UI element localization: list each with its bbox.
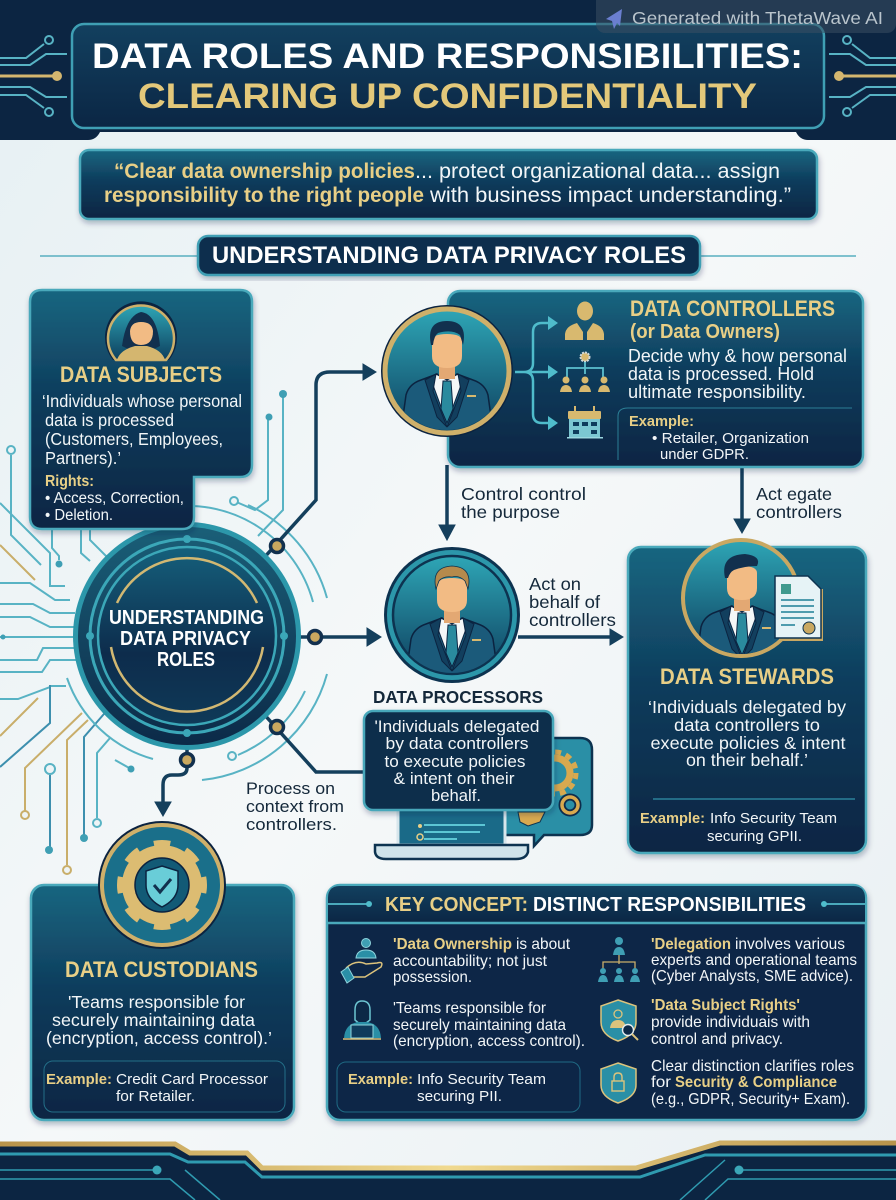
arrow: controllers to stewards [734, 465, 750, 533]
text: clear distinction: Clear distinction clarifies roles [651, 1058, 854, 1075]
description: on their behalf.’ [686, 750, 808, 770]
heading [630, 296, 835, 343]
key concept heading strip: DISTINCT RESPONSIBILITIES [533, 894, 806, 916]
label: process on context: Process on [246, 779, 335, 798]
description [42, 391, 242, 468]
icon: female avatar [105, 301, 177, 360]
icon: delegation org chart [598, 937, 640, 982]
heading: DATA STEWARDS [660, 664, 834, 689]
heading: data processors: DATA PROCESSORS [373, 687, 543, 707]
heading: (or Data Owners) [630, 321, 780, 343]
circuit traces left [0, 36, 67, 116]
hub label: DATA PRIVACY [120, 628, 252, 650]
label: act egate controllers: Act egate [756, 484, 832, 504]
description: 'Teams responsible for [68, 992, 245, 1012]
description: ‘Individuals whose personal [42, 391, 242, 411]
panel: data processor description: behalf. [431, 786, 481, 805]
arrow: hub to processors [298, 628, 381, 646]
rights list: • Deletion. [45, 507, 113, 524]
description [628, 346, 847, 402]
description: execute policies & intent [650, 733, 846, 753]
panel: data processor description: & intent on their [394, 769, 515, 788]
example box: securing PII. [417, 1088, 502, 1105]
arrow: hub to processor box [262, 712, 364, 772]
title panel [72, 24, 824, 128]
icon: hand with person [341, 938, 382, 983]
description: Decide why & how personal [628, 346, 847, 366]
text: delegation: 'Delegation [651, 936, 731, 953]
text: teams responsible: (encryption, access control). [393, 1033, 585, 1050]
section heading [40, 236, 856, 275]
label: act on behalf: controllers [529, 610, 616, 630]
example box: under GDPR. [660, 446, 749, 463]
label: process on context: controllers. [246, 815, 337, 834]
example box: Example: [46, 1071, 112, 1088]
description: Partners).’ [45, 448, 121, 468]
example box: Credit Card Processor [116, 1071, 268, 1088]
footer band [0, 1143, 896, 1200]
description: (encryption, access control).’ [46, 1028, 272, 1048]
icon: shield with search [601, 1000, 638, 1041]
text: clear distinction: Security & Compliance [675, 1074, 837, 1091]
label: process on context [246, 779, 344, 834]
quote text: with business impact understanding.” [429, 184, 791, 207]
icon: steward avatar [683, 540, 799, 663]
text: data subject rights [651, 997, 810, 1048]
text: data ownership: accountability; not just [393, 953, 548, 970]
panel: data subjects [30, 290, 252, 529]
arrow: controllers to processors [439, 465, 455, 540]
example box: Info Security Team [417, 1071, 546, 1088]
title line 2: CLEARING UP CONFIDENTIALITY [138, 77, 757, 116]
circuit traces around hub [0, 390, 327, 874]
title line 1: DATA ROLES AND RESPONSIBILITIES: [92, 37, 803, 76]
text: clear distinction: (e.g., GDPR, Security+ Exam). [651, 1091, 850, 1108]
rights list: • Access, Correction, [45, 490, 184, 507]
icon: certificate [775, 576, 823, 641]
arrow: hub to controllers [262, 364, 376, 560]
description [648, 697, 846, 770]
hub label [109, 607, 264, 671]
example box: for Retailer. [116, 1088, 195, 1105]
hub label: ROLES [157, 649, 215, 671]
text: clear distinction: for [651, 1074, 672, 1091]
example box [44, 1061, 285, 1112]
text: delegation [651, 936, 857, 985]
example box [337, 1062, 580, 1112]
example [640, 810, 837, 845]
label: process on context: context from [246, 797, 344, 816]
panel: data stewards [628, 540, 866, 853]
text: teams responsible [393, 1000, 585, 1050]
example box [618, 408, 852, 463]
circuit traces right [829, 36, 896, 116]
description: data is processed. Hold [628, 364, 814, 384]
icon: gear and shield [98, 821, 226, 949]
text: data subject rights: provide individuais with [651, 1014, 810, 1031]
label: control the purpose [461, 484, 586, 522]
text: teams responsible: securely maintaining data [393, 1017, 566, 1034]
rights list [45, 473, 184, 524]
arrow: processors to stewards [518, 629, 623, 645]
watermark: Generated with ThetaWave AI [632, 8, 883, 28]
example: Info Security Team [710, 810, 837, 827]
header band [0, 0, 896, 140]
text: data ownership: is about [516, 936, 571, 953]
text: teams responsible: 'Teams responsible for [393, 1000, 547, 1017]
panel: data processor description [364, 711, 553, 810]
hub connector dots [180, 540, 322, 766]
text: data ownership [393, 936, 571, 986]
rights list: Rights: [45, 473, 94, 490]
icon: branch arrows [515, 316, 558, 430]
heading: DATA CONTROLLERS [630, 296, 835, 321]
icon: shield with lock [601, 1063, 636, 1103]
text: data subject rights: control and privacy. [651, 1031, 783, 1048]
panel: data processor description: by data controllers [386, 734, 528, 753]
label: act egate controllers [756, 484, 842, 522]
heading: DATA SUBJECTS [60, 362, 222, 387]
example box: Example: [629, 414, 694, 430]
text: clear distinction [651, 1058, 854, 1108]
icon: laptop and gears bubble [375, 738, 592, 859]
connector arrows [155, 364, 750, 816]
text: data ownership: 'Data Ownership [393, 936, 512, 953]
text: delegation: involves various [735, 936, 845, 953]
icon: building [567, 406, 603, 438]
label: act on behalf: behalf of [529, 592, 600, 612]
example box: • Retailer, Organization [652, 430, 809, 447]
example box: Example: [348, 1071, 413, 1088]
heading: DATA CUSTODIANS [65, 957, 258, 982]
text: delegation: (Cyber Analysts, SME advice). [651, 968, 853, 985]
text: data ownership: possession. [393, 969, 472, 986]
text: data subject rights: 'Data Subject Rights' [651, 997, 800, 1014]
example: securing GPII. [707, 828, 802, 845]
label: control the purpose: the purpose [461, 502, 560, 522]
description: ultimate responsibility. [628, 382, 806, 402]
icon: person with laptop [343, 1001, 381, 1039]
key concept heading strip: KEY CONCEPT: [385, 894, 528, 916]
description: data controllers to [674, 715, 820, 735]
hub label: UNDERSTANDING [109, 607, 264, 629]
icon: executive [565, 302, 604, 340]
key concept heading strip [327, 886, 866, 923]
panel: data processor description: 'Individuals delegated [374, 717, 540, 736]
quote text: responsibility to the right people [104, 184, 424, 207]
icon: controller avatar [381, 305, 513, 437]
panel: data controllers [381, 291, 863, 467]
panel: data custodians [31, 821, 294, 1120]
quote text [104, 160, 791, 207]
panel: data processor description: to execute policies [384, 752, 526, 771]
description: data is processed [45, 410, 174, 430]
section heading: UNDERSTANDING DATA PRIVACY ROLES [212, 242, 686, 269]
panel: key concept [327, 885, 866, 1120]
label: act egate controllers: controllers [756, 502, 842, 522]
icon: org chart [560, 352, 610, 392]
central hub [73, 522, 322, 766]
text: delegation: experts and operational teams [651, 952, 857, 969]
watermark [596, 0, 896, 33]
description: (Customers, Employees, [45, 429, 223, 449]
icon: processor avatar [384, 547, 520, 683]
arrow: hub to custodians [155, 748, 187, 816]
description [46, 992, 272, 1048]
description: ‘Individuals delegated by [648, 697, 846, 717]
example: Example: [640, 810, 705, 827]
hub ring nodes [86, 535, 288, 737]
description: securely maintaining data [52, 1010, 255, 1030]
quote text: ... protect organizational data... assign [415, 160, 780, 183]
quote text: “Clear data ownership policies [114, 160, 415, 183]
label: act on behalf [529, 574, 616, 630]
label: act on behalf: Act on [529, 574, 581, 594]
quote panel [80, 150, 817, 219]
label: control the purpose: Control control [461, 484, 586, 504]
